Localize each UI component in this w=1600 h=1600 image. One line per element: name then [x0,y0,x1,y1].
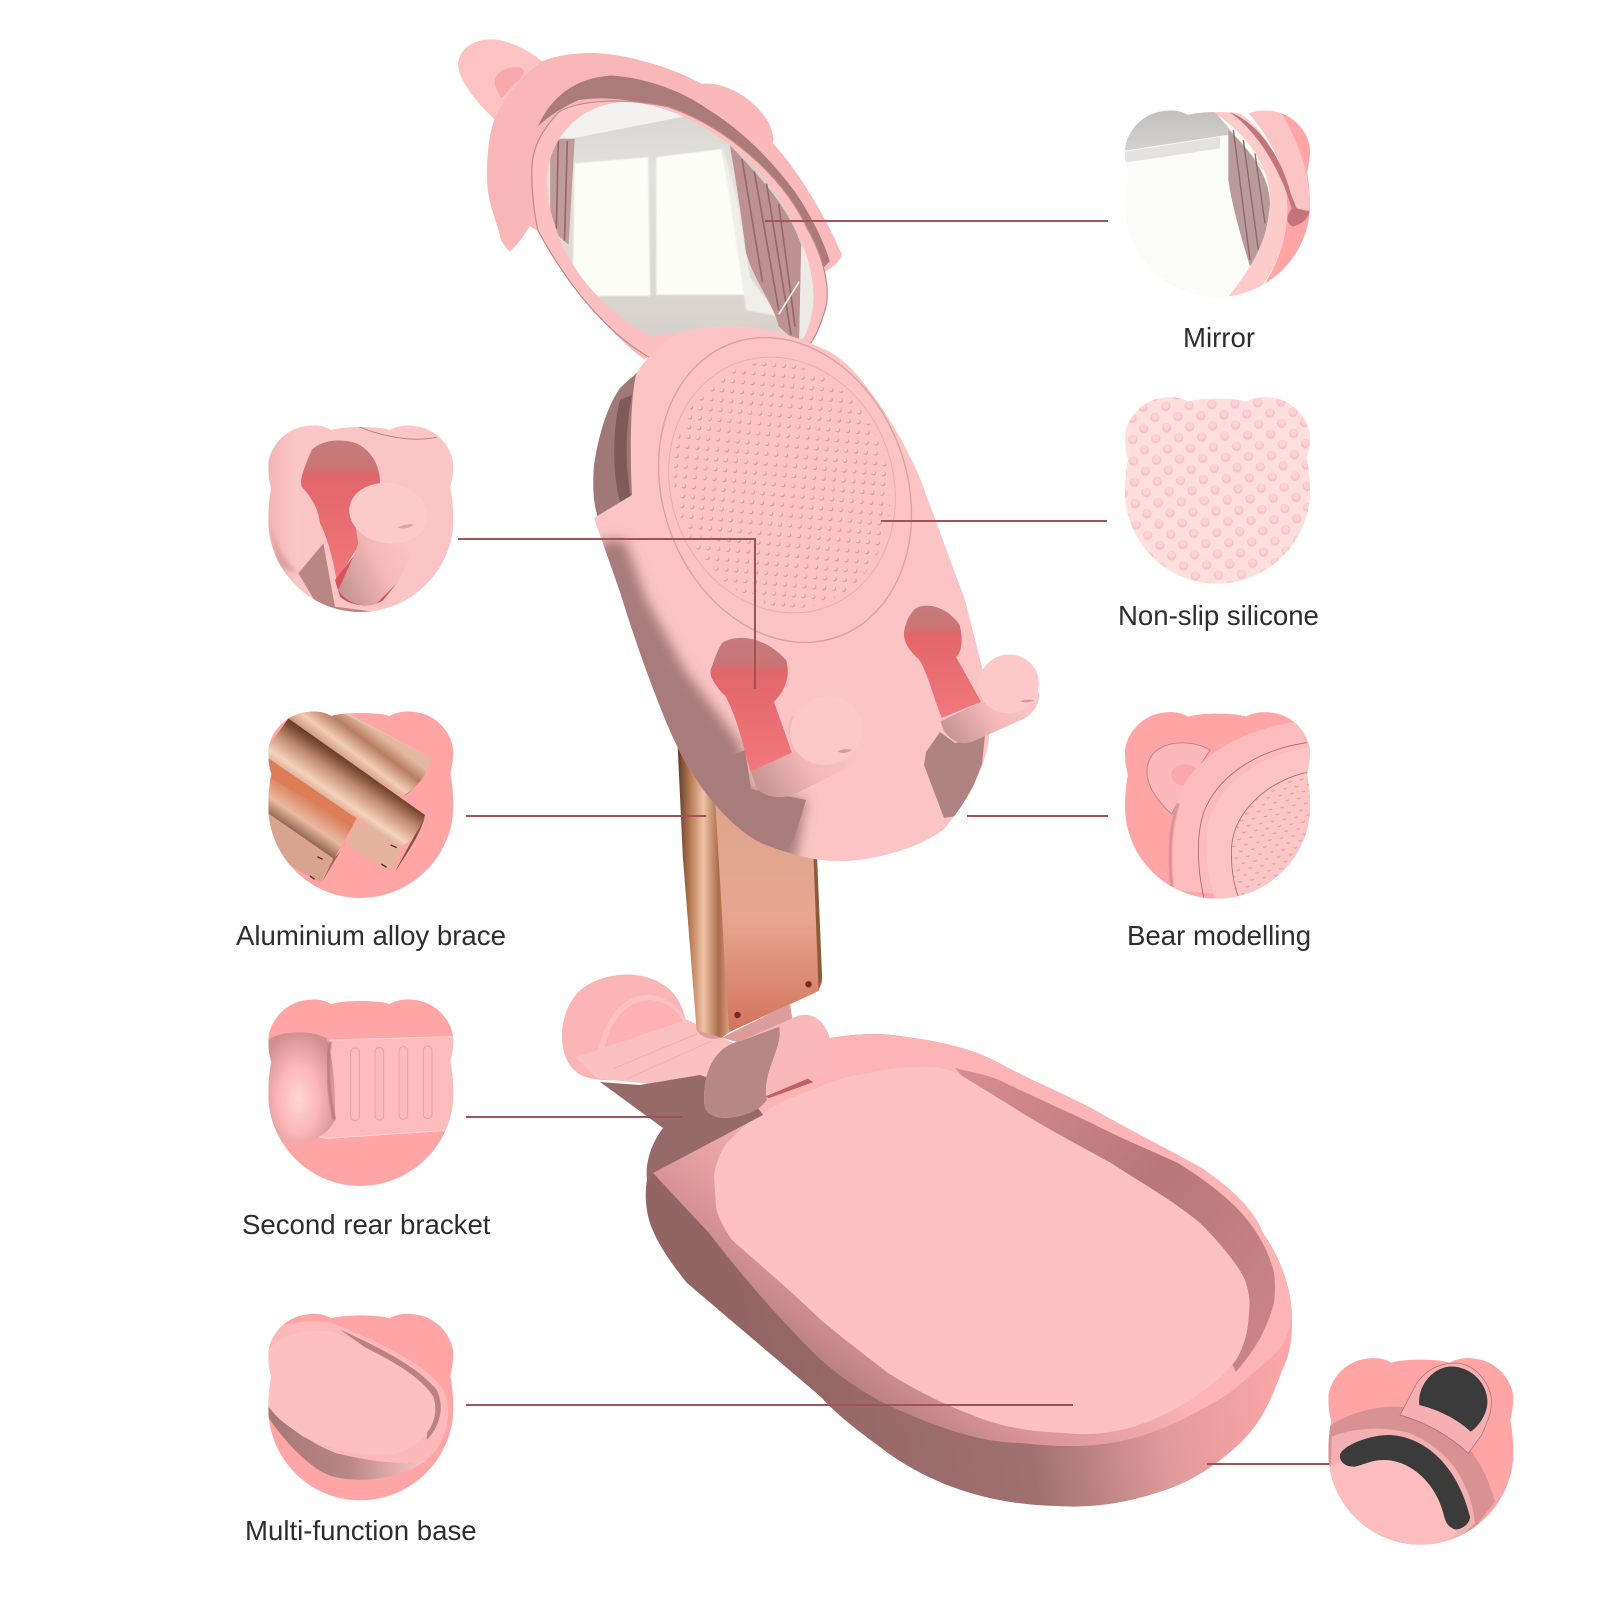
plate shading [590,540,985,870]
label: multi-function base: Multi-function base [245,1515,477,1546]
right peg [941,670,1039,743]
aluminium line [466,815,706,817]
anti-slip pad line [1207,1463,1329,1465]
bracket cast shadow [600,1075,763,1180]
loop hole [495,67,524,98]
callout lines [458,221,1329,1464]
phone holder plate [590,302,989,870]
hook line [458,539,755,689]
bracket line [466,1116,683,1118]
base inner wall [955,1068,1275,1372]
plate front [594,326,989,861]
mirror assembly [458,39,842,359]
bear line [967,815,1108,817]
base rim top [653,1034,1292,1446]
pad tab [1400,1363,1492,1453]
bracket knob [562,975,687,1080]
inner shell shadow [538,76,830,269]
non-slip silicone pad [633,325,931,645]
thumbnail: base [267,1312,457,1502]
mirror frame [532,101,827,359]
holder hooks [710,606,1048,797]
brace side rail [677,743,729,1038]
base floor [714,1067,1250,1434]
silicone line [881,520,1107,522]
thumbnail: rear bracket [267,997,457,1187]
label: non-slip silicone: Non-slip silicone [1118,600,1319,631]
hinge stem [697,1004,794,1045]
label: aluminium alloy brace: Aluminium alloy brace [236,920,506,951]
thumbnail: non-slip silicone [1123,395,1313,585]
hinge barrel [704,1015,833,1118]
mirror glass [546,102,814,340]
brace face [715,800,822,1032]
aluminium brace and hinge [677,743,833,1118]
right hook recess [904,606,981,718]
multi-function base [600,1034,1292,1507]
label: mirror: Mirror [1183,322,1255,353]
mirror back shell [487,53,842,359]
thumbnail: anti-slip pads [1327,1356,1517,1547]
mirror line [765,220,1108,222]
label: second rear bracket: Second rear bracket [242,1209,491,1240]
thumbnail: bear modelling [1123,710,1313,903]
plate ring groove [658,336,912,644]
phone stand product [458,39,1292,1507]
plate back side [593,359,652,518]
pad strip [1340,1435,1470,1529]
thumbnail: mirror [1123,108,1313,300]
rear bracket [562,975,733,1087]
bracket plate [576,1020,733,1087]
base outer body [646,1034,1292,1507]
base line [466,1404,1073,1406]
hanging loop [458,39,544,120]
label: bear modelling: Bear modelling [1127,920,1311,951]
thumbnail: aluminium tubes [267,710,457,900]
brace screw holes [734,1012,741,1018]
left peg [751,707,863,797]
left hook recess [710,638,794,771]
thumbnail: hook [267,423,457,615]
